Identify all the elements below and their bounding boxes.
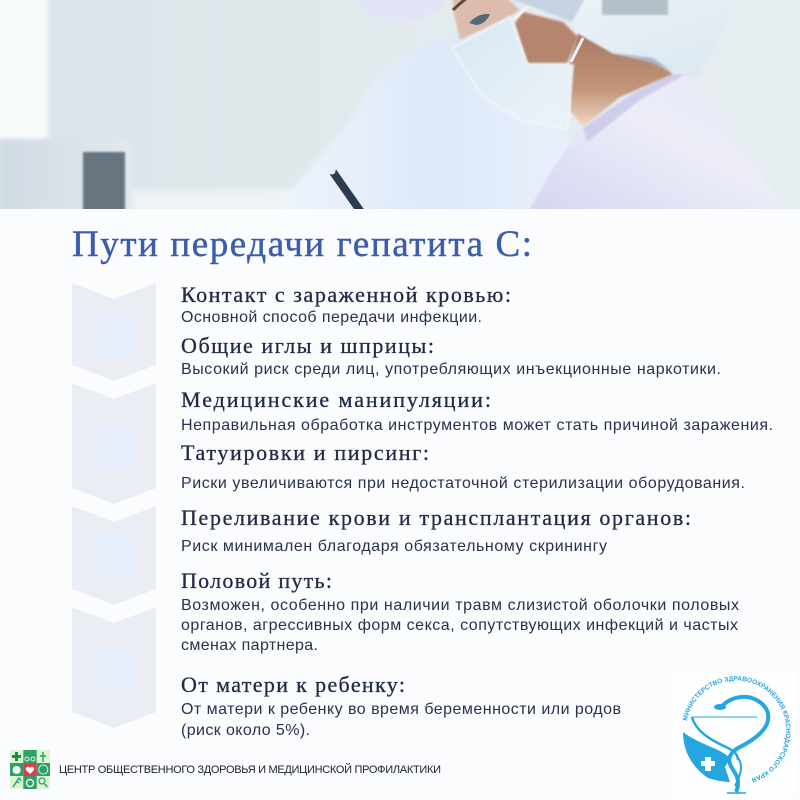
item: shared needles: Высокий риск среди лиц, употребляющих инъекционные наркотики. [181, 361, 721, 378]
item: contact with blood: Контакт с зараженной кровью: [181, 282, 511, 307]
item: transfusion and transplantation: Переливание крови и трансплантация органов: [181, 505, 691, 530]
item: transfusion and transplantation [181, 505, 691, 555]
ministry logo: bowl of hygieia [682, 676, 791, 794]
logo bowl and cross [683, 732, 730, 782]
item: shared needles: Общие иглы и шприцы: [181, 333, 434, 358]
item: sexual transmission: Половой путь: [181, 568, 332, 593]
chevron 3 [72, 506, 156, 605]
item: sexual transmission [181, 568, 739, 654]
item: medical procedures [181, 387, 773, 434]
item: mother to child: От матери к ребенку: [181, 672, 405, 697]
item: mother to child [181, 672, 621, 739]
footer logo: health centre icon grid [10, 750, 50, 789]
chevron column [72, 283, 156, 728]
item: tattoos and piercing: Риски увеличиваются при недостаточной стерилизации оборудования. [181, 475, 745, 492]
item: tattoos and piercing: Татуировки и пирсинг: [181, 440, 429, 465]
item: medical procedures: Неправильная обработка инструментов может стать причиной заражения. [181, 417, 773, 434]
title: Пути передачи гепатита С: [72, 224, 532, 265]
hero photo: medical worker in mask and cap [0, 0, 800, 215]
item: transfusion and transplantation: Риск минимален благодаря обязательному скринингу [181, 538, 607, 555]
item: sexual transmission: сменах партнера. [181, 637, 318, 654]
item: sexual transmission: органов, агрессивных форм секса, сопутствующих инфекций и частых [181, 617, 738, 634]
item: tattoos and piercing [181, 440, 745, 492]
logo serpent [722, 697, 768, 792]
item: medical procedures: Медицинские манипуляции: [181, 387, 491, 412]
chevron 4 [72, 607, 156, 728]
footer organisation name: ЦЕНТР ОБЩЕСТВЕННОГО ЗДОРОВЬЯ И МЕДИЦИНСКОЙ ПРОФИЛАКТИКИ [59, 763, 441, 776]
item: contact with blood [181, 282, 511, 326]
item: shared needles [181, 333, 721, 378]
item: sexual transmission: Возможен, особенно при наличии травм слизистой оболочки половых [181, 597, 739, 614]
chevron 1 [72, 283, 156, 381]
item: mother to child: От матери к ребенку во время беременности или родов [181, 701, 621, 718]
item: contact with blood: Основной способ передачи инфекции. [181, 309, 482, 326]
logo ring text: МИНИСТЕРСТВО ЗДРАВООХРАНЕНИЯ КРАСНОДАРСКОГО КРАЯ [682, 676, 791, 782]
chevron 2 [72, 383, 156, 504]
item: mother to child: (риск около 5%). [181, 722, 310, 739]
